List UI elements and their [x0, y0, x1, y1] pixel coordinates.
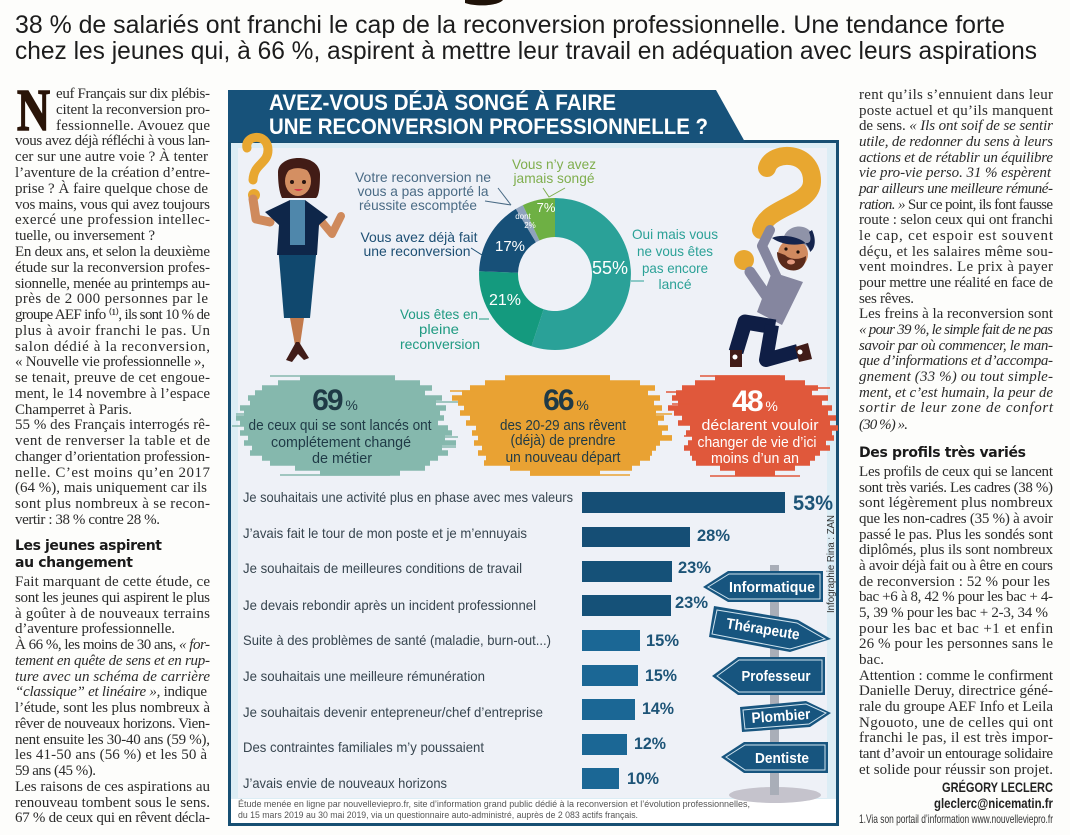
bar chart [243, 489, 833, 791]
stat: 48%: moins d’un an [711, 450, 799, 467]
article intro text: plus à avoir franchi le pas. Un [15, 323, 210, 339]
stat: 66%: (déjà) de prendre [510, 432, 616, 449]
article text: profils: Les profils de ceux qui se lancent [859, 464, 1054, 480]
donut values: 7% [537, 200, 556, 215]
article text: continuation: ment, et c’est humain, la peur de [859, 385, 1053, 401]
donut labels: Votre reconversion ne [355, 169, 491, 185]
article text: continuation: de sens. « Ils ont soif de se sentir [859, 118, 1053, 134]
bar values [627, 492, 833, 788]
article text: profils [859, 464, 1054, 778]
donut labels: pas encore [642, 260, 708, 276]
article intro text: 55 % des Français interrogés rê- [15, 417, 210, 433]
donut values: 55% [592, 258, 628, 278]
article intro text: l’aventure de la création d’entre- [15, 165, 210, 181]
article text: profils: de reconversion : 52 % pour les [859, 574, 1050, 590]
post [770, 565, 779, 795]
donut values: dont [515, 212, 532, 221]
banner title: UNE RECONVERSION PROFESSIONNELLE ? [269, 114, 708, 139]
article text: profils: Attention : comme le confirment [859, 668, 1054, 684]
article intro text: fessionnelle. Avouez que [56, 118, 210, 134]
article text: continuation: vie pro-vie perso. 31 % espèrent [859, 165, 1052, 181]
stat: 69%: de ceux qui se sont lancés ont [248, 417, 432, 434]
article intro text: (64 %), mais uniquement car ils [15, 480, 207, 496]
article text: les jeunes: nent ensuite les 30-40 ans (59 %), [15, 732, 210, 748]
segment 55% [532, 198, 631, 350]
bar values: 15% [646, 631, 679, 650]
article intro text: sionnelle, menée au printemps au- [15, 276, 210, 292]
donut labels: Vous avez déjà fait [360, 229, 478, 245]
sign: Informatique: Informatique [729, 579, 815, 596]
article text: les jeunes: Fait marquant de cette étude, ce [15, 574, 210, 590]
article text: continuation: « pour 39 %, le simple fait de ne pas [859, 322, 1053, 338]
article intro text: nelle. C’est moins qu’en 2017 [15, 465, 210, 481]
post shadow [729, 787, 821, 803]
article text: profils: passé le pas. Plus les sondés sont [859, 527, 1054, 543]
donut labels [355, 156, 718, 352]
heading: profils: Des profils très variés [859, 445, 1026, 461]
article intro text: exercé une profession intellec- [15, 212, 210, 228]
article text: profils: diplômés, plus ils sont nombreux [859, 542, 1054, 558]
stat: 66%: 66 % [543, 384, 589, 417]
survey source note: du 15 mars 2019 au 30 mai 2019, via un questionnaire auto-administré, auprès de 2 083 actifs français. [238, 810, 638, 820]
article intro text: vent de renverser la table et de [15, 433, 210, 449]
article intro text: euf Français sur dix plébis- [56, 86, 210, 102]
panel inner light edge [231, 143, 836, 799]
article text: continuation: vent moindres. Le prix à payer [859, 259, 1053, 275]
stat: 66%: un nouveau départ [506, 449, 621, 466]
sign: Informatique [703, 571, 823, 602]
stat: 69%: complétement changé [271, 434, 411, 451]
article intro text: « Nouvelle vie professionnelle », [15, 354, 205, 370]
article text: continuation: déçu, et les salaires même sou- [859, 244, 1053, 260]
article text: profils: et solide pour réussir son projet. [859, 762, 1053, 778]
byline [934, 779, 1053, 811]
article text: les jeunes: rêver de nouveaux horizons. Vien- [15, 716, 210, 732]
article text: les jeunes: sont les jeunes qui aspirent le plus [15, 590, 210, 606]
article text: les jeunes: 59 ans (45 %). [15, 763, 96, 779]
donut labels: ne vous êtes [637, 243, 713, 259]
segment 21% [479, 271, 544, 346]
credit: Infographie Rina : ZAN [826, 515, 837, 613]
article text: continuation: utile, de redonner du sens à leurs [859, 134, 1053, 150]
article text: continuation: Les freins à la reconversion sont [859, 306, 1054, 322]
bar labels: Je souhaitais une activité plus en phase avec mes valeurs [243, 489, 573, 505]
article intro text: cer sur une autre voie ? À tenter [15, 148, 208, 165]
survey source note: Étude menée en ligne par nouvelleviepro.fr, site d’information grand public dédié à la reconversion et l’évolution professionnelles, [238, 799, 750, 809]
donut labels: vous a pas apporté la [358, 183, 489, 199]
panel frame [230, 142, 838, 824]
donut chart [355, 156, 718, 352]
banner title: AVEZ-VOUS DÉJÀ SONGÉ À FAIRE [269, 90, 616, 115]
left text column [15, 77, 210, 826]
icon: man climbing question mark [730, 156, 815, 367]
donut values: 2% [524, 221, 536, 230]
stat: 66%: des 20-29 ans rêvent [500, 417, 627, 434]
donut labels: jamais songé [513, 170, 595, 186]
sign: Dentiste [721, 742, 828, 773]
article text: profils: bac. [859, 652, 884, 668]
article text: profils: Ngouoto, une de celles qui ont [859, 715, 1054, 731]
bar values: 28% [697, 526, 730, 545]
article text: les jeunes: À 66 %, les moins de 30 ans, « for- [15, 636, 210, 653]
article intro text: En deux ans, et selon la deuxième [15, 244, 210, 260]
stat: 48%: changer de vie d’ici [698, 434, 816, 451]
donut values [489, 200, 628, 309]
article intro text: vos mains, vous qui avez toujours [15, 197, 210, 213]
bar labels: Je devais rebondir après un incident professionnel [243, 597, 536, 613]
article intro text: étude sur la reconversion profes- [15, 260, 210, 276]
article intro text: changer d’orientation profession- [15, 449, 210, 465]
bar values: 12% [634, 734, 666, 753]
article text: continuation: savoir par où commencer, le man- [859, 338, 1053, 354]
signpost [703, 565, 831, 803]
sign: Professeur: Professeur [742, 668, 811, 685]
stat: 48%: 48 % [732, 385, 778, 418]
subtitle: 38 % de salariés ont franchi le cap de la reconversion professionnelle. Une tendance forte [15, 11, 1005, 39]
donut labels: une reconversion [364, 243, 470, 259]
stat: 66% [450, 376, 672, 475]
infographic panel [228, 90, 838, 824]
article text: profils: 26 % pour les personnes sans le [859, 636, 1053, 652]
article text: continuation: pour mettre une réalité en face de [859, 275, 1053, 291]
donut labels: Vous êtes en [400, 306, 478, 322]
bar labels: Je souhaitais une meilleure rémunération [243, 668, 485, 684]
title fragment: descender of cropped headline [465, 0, 503, 5]
article text: continuation [858, 87, 1054, 433]
sign: Thérapeute [709, 606, 831, 652]
bar values: 53% [793, 492, 833, 515]
sign: Thérapeute: Thérapeute [725, 615, 801, 644]
icon: woman with question mark [247, 137, 341, 362]
article text: les jeunes: renouveau tombent sous le sens. [15, 795, 210, 811]
article text: continuation: poste actuel et qu’ils manquent [859, 103, 1054, 119]
article text: les jeunes: “classique” et linéaire », indique [15, 684, 207, 700]
bar values: 23% [678, 558, 711, 577]
panel background [238, 148, 827, 798]
bar labels [243, 489, 573, 791]
article intro text: sont plus nombreux à se recon- [15, 496, 210, 512]
bar labels: J’avais envie de nouveaux horizons [243, 775, 447, 791]
article text: les jeunes: Les raisons de ces aspirations au [15, 779, 210, 795]
bars [582, 492, 785, 789]
donut labels: reconversion [400, 336, 480, 352]
bar labels: Des contraintes familiales m’y poussaient [243, 739, 484, 755]
article intro text: tuelle, ou inversement ? [15, 228, 155, 244]
article text: profils: franchi le pas, il est très impor- [859, 730, 1053, 746]
segment 17% [479, 209, 536, 273]
segment 7% [523, 198, 555, 240]
bar values: 14% [642, 699, 674, 718]
article text: profils: 5, 39 % pour les bac + 2-3, 34 % [859, 605, 1048, 621]
article text: profils: rale du groupe AEF Info et Leila [859, 699, 1053, 715]
article text: les jeunes [15, 574, 210, 826]
bar labels: Je souhaitais devenir entepreneur/chef d’entreprise [243, 704, 543, 720]
donut leader lines [471, 188, 644, 319]
stat: 69%: de métier [312, 450, 372, 467]
donut labels: Oui mais vous [632, 226, 718, 242]
article intro text: groupe AEF info ⁽¹⁾, ils sont 10 % de [15, 307, 210, 323]
article text: les jeunes: ture avec un schéma de carrière [15, 669, 210, 685]
bar labels: J’avais fait le tour de mon poste et je m’ennuyais [243, 525, 527, 541]
donut labels: lancé [658, 276, 692, 292]
stat: 69% [232, 376, 460, 475]
article text: les jeunes: l’étude, sont les plus nombreux à [15, 700, 210, 716]
article intro text: Champerret à Paris. [15, 402, 132, 418]
bar values: 10% [627, 769, 659, 788]
article intro text: ment, le 14 novembre à l’espace [15, 386, 210, 402]
sign: Plombier [740, 701, 831, 732]
survey source note [238, 799, 750, 820]
donut labels: Vous n’y avez [512, 156, 596, 172]
article intro text [15, 86, 210, 528]
article text: continuation: sortir de leur zone de confort [859, 400, 1054, 416]
heading: les jeunes: au changement [15, 555, 133, 571]
bar labels: Je souhaitais de meilleures conditions de travail [243, 560, 522, 576]
article intro text: citent la reconversion pro- [56, 102, 210, 118]
article intro text: vous avez déjà réfléchi à vous lan- [15, 133, 210, 149]
article text: profils: sont très variés. Les cadres (38 %) [859, 480, 1053, 496]
article text: profils: tant d’avoir un entourage solidaire [859, 746, 1053, 762]
article text: continuation: le cap, cet espoir est souvent [859, 228, 1054, 244]
bar values: 15% [645, 666, 677, 685]
article text: les jeunes: 67 % de ceux qui en rêvent décla- [15, 810, 210, 826]
article text: continuation: gnement (33 %) ou tout simple- [859, 369, 1053, 385]
article text: continuation: ses rêves. [859, 291, 914, 307]
stat: 48% [666, 376, 838, 476]
right text column [858, 87, 1054, 826]
drop cap: N [17, 77, 50, 143]
article intro text: prise ? À faire quelque chose de [15, 180, 208, 197]
donut values: 17% [495, 238, 525, 255]
sign: Professeur [712, 657, 825, 695]
article intro text: vertir : 38 % contre 28 %. [15, 512, 160, 528]
heading: les jeunes [15, 538, 162, 571]
article text: continuation: route : selon ceux qui ont franchi [859, 212, 1053, 228]
article text: profils: Danielle Deruy, directrice géné- [859, 683, 1053, 699]
sign: Plombier: Plombier [751, 706, 811, 727]
article text: profils: pour les bac et bac +1 et enfin [859, 621, 1054, 637]
article text: profils: à avoir déjà fait ou à être en cours [859, 558, 1053, 574]
article text: les jeunes: d’aventure professionnelle. [15, 621, 175, 637]
stat: 69%: 69 % [312, 384, 358, 417]
article text: profils: bac +6 à 8, 42 % pour les bac + 4- [859, 589, 1053, 605]
article intro text: salon dédié à la reconversion, [15, 339, 210, 355]
article text: profils: que les non-cadres (35 %) à avoir [859, 511, 1053, 527]
stat: 48%: déclarent vouloir [702, 417, 819, 434]
article text: profils: sont légèrement plus nombreux [859, 495, 1054, 511]
article text: les jeunes: les 41-50 ans (56 %) et les 50 à [15, 747, 207, 763]
donut labels: réussite escomptée [359, 197, 477, 213]
bar values: 23% [675, 593, 708, 612]
article intro text: près de 2 000 personnes par le [15, 291, 208, 307]
article text: les jeunes: à goûter à de nouveaux terrains [15, 606, 210, 622]
banner [228, 90, 745, 142]
article text: continuation: par ailleurs une meilleure rémuné- [858, 181, 1053, 197]
heading: les jeunes: Les jeunes aspirent [15, 538, 162, 554]
bar labels: Suite à des problèmes de santé (maladie, burn-out...) [243, 632, 551, 648]
sign: Dentiste: Dentiste [755, 750, 809, 767]
article text: continuation: actions et de rétablir un équilibre [859, 150, 1053, 166]
article text: continuation: que d’informations et d’accompa- [859, 353, 1053, 369]
article text: continuation: ration. » Sur ce point, ils font fausse [859, 197, 1053, 213]
article text: continuation: (30 %) ». [859, 417, 908, 433]
donut values: 21% [489, 292, 521, 309]
donut labels: pleine [419, 321, 459, 337]
article text: les jeunes: tement en quête de sens et en rup- [15, 653, 210, 669]
subtitle [15, 11, 1037, 65]
segment dont 2% [516, 205, 539, 242]
subtitle: chez les jeunes qui, à 66 %, aspirent à mettre leur travail en adéquation avec leurs aspirations [15, 37, 1037, 65]
article intro text: se tenait, preuve de cet engoue- [15, 370, 210, 386]
banner title [269, 90, 708, 139]
article text: continuation: rent qu’ils s’ennuient dans leur [859, 87, 1053, 103]
